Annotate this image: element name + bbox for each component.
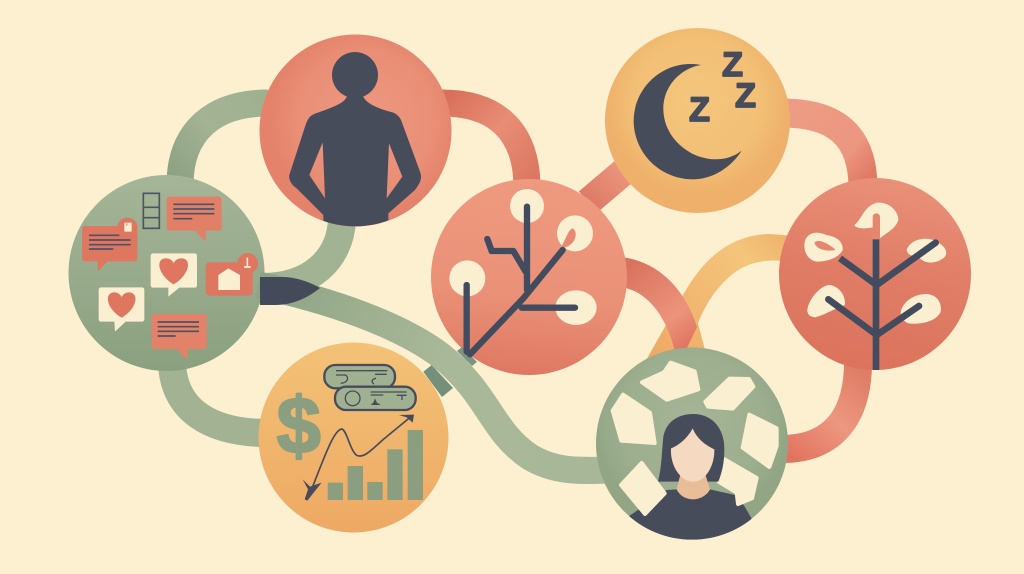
leaf blobs [804,203,946,324]
icon: sleep letters: Z [722,46,743,84]
icon: person silhouette [289,52,421,232]
neck [677,473,710,499]
icon: dollar sign: $ [277,381,321,470]
connector: woman to leafy tree, amber [645,234,795,362]
body [629,489,752,540]
coral accents [814,213,880,251]
circle: social media [68,175,264,371]
connector: person to social [262,220,342,287]
connector: person to branching tree [442,103,527,188]
branches [467,207,575,354]
connector: branching tree to moon [588,168,628,202]
icon: message bubble top right [167,197,222,242]
connector stub: finance [423,365,453,397]
circle: person [260,34,452,232]
coral bud [562,228,576,247]
fragments [613,363,777,514]
connector: dark junction [260,277,320,305]
icon: woman portrait with scattered fragments [613,363,777,547]
icon: heart bubble lower left [99,287,144,332]
connector: social to person [180,103,268,185]
face [671,428,714,482]
icon: message bubble bottom [152,314,207,360]
connector: branching tree to woman, coral [620,257,697,352]
icon: heart bubble center [151,253,197,297]
bar chart [328,430,423,500]
hair [658,414,724,482]
connector: social to finance [172,360,268,433]
branches [828,239,936,370]
circle: moon and sleep [605,28,790,213]
icon: crescent moon [634,64,742,179]
circle: leafy tree [779,178,971,370]
connector: moon to leafy tree [782,113,863,188]
connector: leafy tree to woman [782,362,858,449]
icon: sleep letters: Z [735,77,756,115]
blossoms [449,189,597,325]
icon: message bubble with badge [82,218,137,272]
icon: sleep letters [689,46,756,129]
icon: banknotes [324,365,416,410]
circle: branching tree [431,179,627,375]
circle: finance [258,342,448,532]
connector stub: tree base [457,347,477,366]
icon: branching tree [449,189,597,354]
icon: leafy tree [804,203,946,370]
social icons [82,193,258,360]
icon: sleep letters: Z [689,91,710,129]
line chart arrow [303,415,414,501]
connector: main winding path [258,285,610,470]
icon: notification with house [206,253,258,296]
infographic canvas [68,28,971,540]
icon: film strip [143,193,159,228]
icon: finance illustration [277,365,423,501]
circle: woman [596,348,788,547]
